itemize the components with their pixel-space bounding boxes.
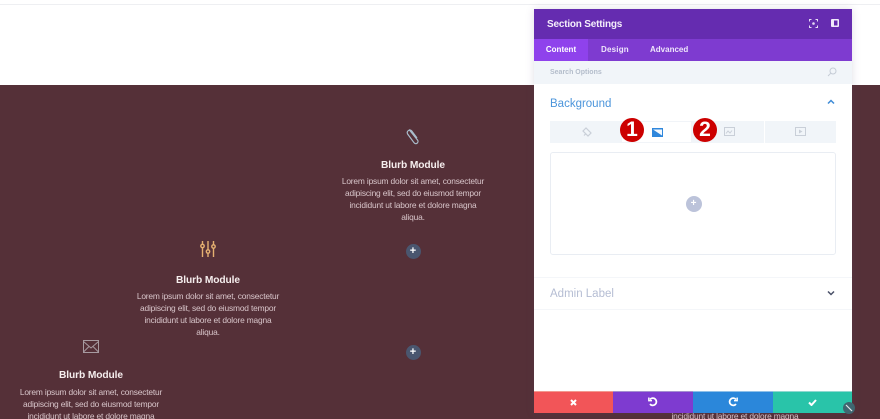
body text: Lorem ipsum dolor sit amet, consectetur (20, 387, 162, 397)
icon: expand (809, 19, 818, 28)
icon: check (808, 399, 817, 406)
number badge 1 (620, 118, 644, 142)
blurb: paperclip (342, 129, 484, 222)
icon: search (828, 68, 836, 76)
background type tabs (550, 121, 836, 143)
body text: adipiscing elit, sed do eiusmod tempor (140, 303, 276, 313)
body text: adipiscing elit, sed do eiusmod tempor (345, 188, 481, 198)
icon: colour tab (582, 127, 592, 137)
tab: content: Content (546, 45, 576, 54)
body text: aliqua. (401, 212, 425, 222)
icon: split view (831, 19, 839, 27)
button: redo (693, 391, 773, 413)
search placeholder: Search Options (550, 69, 602, 76)
body text: Lorem ipsum dolor sit amet, consectetur (342, 176, 484, 186)
body text: aliqua. (196, 327, 220, 337)
heading: Blurb Module (59, 370, 123, 381)
add button: + (410, 346, 416, 358)
number badge 2 (693, 118, 717, 142)
body text: incididunt ut labore et dolore magna (349, 200, 477, 210)
divider (764, 121, 765, 143)
body text: Lorem ipsum dolor sit amet, consectetur (137, 291, 279, 301)
search bar (534, 61, 852, 84)
divider (534, 277, 852, 278)
button: save (773, 391, 852, 413)
icon: paperclip (406, 129, 419, 144)
active gradient tab (621, 121, 692, 143)
tab: advanced: Advanced (650, 45, 688, 54)
icon: video tab (795, 127, 806, 136)
tab bar (534, 39, 852, 61)
panel: section settings (534, 9, 852, 413)
admin label heading: Admin Label (550, 288, 614, 300)
resize handle (843, 402, 855, 414)
brown section background (0, 85, 880, 419)
add button: + (410, 245, 416, 257)
icon: chevron up (828, 100, 834, 104)
page top line (0, 4, 880, 5)
icon: resize arrows (846, 404, 852, 412)
action bar (534, 391, 852, 413)
add button (406, 345, 420, 360)
icon: undo (648, 397, 658, 406)
heading: Blurb Module (176, 275, 240, 286)
body text: incididunt ut labore et dolore magna (144, 315, 272, 325)
icon: image tab (724, 127, 735, 136)
button: cancel (534, 391, 613, 413)
panel header (534, 9, 852, 39)
tab: design: Design (601, 45, 629, 54)
number badge 2: 2 (699, 118, 711, 141)
image upload box (550, 152, 836, 255)
button: undo (613, 391, 693, 413)
panel title: Section Settings (547, 19, 622, 30)
icon: gradient (652, 128, 663, 137)
heading: Blurb Module (381, 160, 445, 171)
number badge 1: 1 (626, 118, 638, 141)
icon: sliders (200, 241, 216, 257)
divider (534, 309, 852, 310)
body text (137, 291, 280, 337)
add image button: + (691, 198, 696, 209)
body text: adipiscing elit, sed do eiusmod tempor (23, 399, 159, 409)
background heading: Background (550, 98, 611, 110)
icon: cross (570, 399, 577, 406)
blurb: envelope (20, 340, 162, 419)
add image button (686, 196, 702, 212)
icon: redo (728, 397, 738, 406)
icon: chevron down (828, 291, 834, 296)
body text (20, 387, 162, 419)
blurb: sliders (137, 241, 280, 337)
icon: envelope (83, 340, 99, 353)
add button (406, 244, 420, 259)
body text (342, 176, 484, 222)
tab: content (534, 39, 588, 61)
